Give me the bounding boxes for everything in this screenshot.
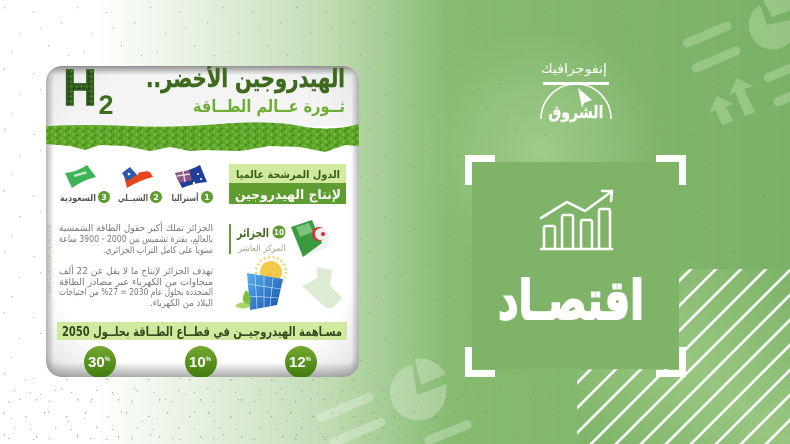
contribution heading band: مسـاهمة الهيدروجيــن في قطــاع الطــاقة بحلــول 2050 [62, 325, 342, 340]
label: Saudi Arabia: 3 [101, 193, 107, 202]
contribution heading band [57, 322, 347, 340]
flag: Algeria [291, 220, 330, 257]
stat: 30%: % [105, 357, 111, 363]
logo arc [541, 84, 611, 119]
corner brackets [468, 158, 682, 374]
logo cursor [578, 88, 592, 108]
paragraph 1 [59, 221, 213, 256]
stat: 10%: % [206, 357, 212, 363]
candidate countries box: الدول المرشحة عالميا [236, 169, 340, 181]
flag: Saudi Arabia [65, 165, 96, 188]
paragraph 2: البلاد من الكهرباء. [150, 298, 213, 309]
big H letter: H [64, 59, 96, 116]
label: Chile [118, 191, 162, 204]
paragraph 2 [59, 264, 213, 309]
label: Australia: 1 [204, 193, 210, 202]
decorative shapes: top right chart motif [682, 0, 790, 125]
paragraph 2: المتجددة بحلول عام 2030 = 27% من احتياجات [59, 287, 213, 298]
paragraph 1: بالعالم، بفترة تشميس بين 2000 - 3900 ساعة [59, 234, 213, 245]
subtitle: ثــورة عــالم الطــاقة [193, 97, 345, 117]
label: Australia [172, 191, 213, 204]
Algeria rank [229, 224, 286, 254]
category word: اقتصـاد [498, 269, 644, 332]
Algeria rank: 10 [274, 228, 284, 237]
flag: Australia [175, 165, 207, 188]
stat: 12%: 12 [289, 354, 306, 371]
logo wordmark: الشروق [548, 103, 604, 123]
flag: Chile [122, 167, 153, 188]
paragraph 2: ميجاوات من الكهرباء عبر مصادر الطاقة [59, 277, 213, 288]
Echorouk infographic logo [541, 62, 611, 123]
label: Saudi Arabia [60, 191, 110, 204]
label: Saudi Arabia: السعودية [60, 194, 96, 204]
logo caption: إنفوجرافيك [541, 62, 607, 77]
candidate countries box [229, 164, 346, 204]
diagonal stripes panel [577, 269, 790, 444]
solar panel with sun and leaves [235, 257, 286, 310]
label: Australia: أستراليا [172, 192, 198, 204]
card edge shading [46, 66, 359, 377]
stat: 12% [285, 346, 317, 378]
main square panel [472, 162, 679, 369]
label: Chile: 2 [153, 193, 159, 202]
icon: rising bar chart [541, 191, 612, 249]
stat: 10% [185, 346, 217, 378]
Algeria rank: الجزائر [236, 226, 269, 240]
subscript 2: 2 [98, 90, 114, 120]
stat: 10%: 10 [189, 354, 206, 371]
stat: 12%: % [306, 357, 312, 363]
decorative shapes: bottom chart motif [316, 359, 473, 444]
candidate countries box: لإنتاج الهيدروجين [235, 188, 341, 203]
title: الهيدروجين الأخضر.. [146, 63, 345, 94]
infographic card [46, 59, 359, 378]
stat: 30%: 30 [88, 354, 105, 371]
paragraph 2: تهدف الجزائر لإنتاج ما لا يقل عن 22 ألف [59, 264, 213, 277]
paragraph 1: الجزائر تملك أكبر حقول الطاقة الشمسية [59, 221, 213, 234]
Algeria rank: المركز العاشر [238, 244, 286, 254]
paragraph 1: سنوياً على كامل التراب الجزائري. [103, 243, 213, 256]
map of Algeria [302, 267, 342, 308]
label: Chile: الشيــلي [118, 194, 148, 204]
logo bar [543, 82, 609, 85]
stat: 30% [84, 346, 116, 378]
grass band [46, 122, 359, 152]
vertical copyright: © WWW.ECHOROUKONLINE.COM [46, 224, 53, 300]
